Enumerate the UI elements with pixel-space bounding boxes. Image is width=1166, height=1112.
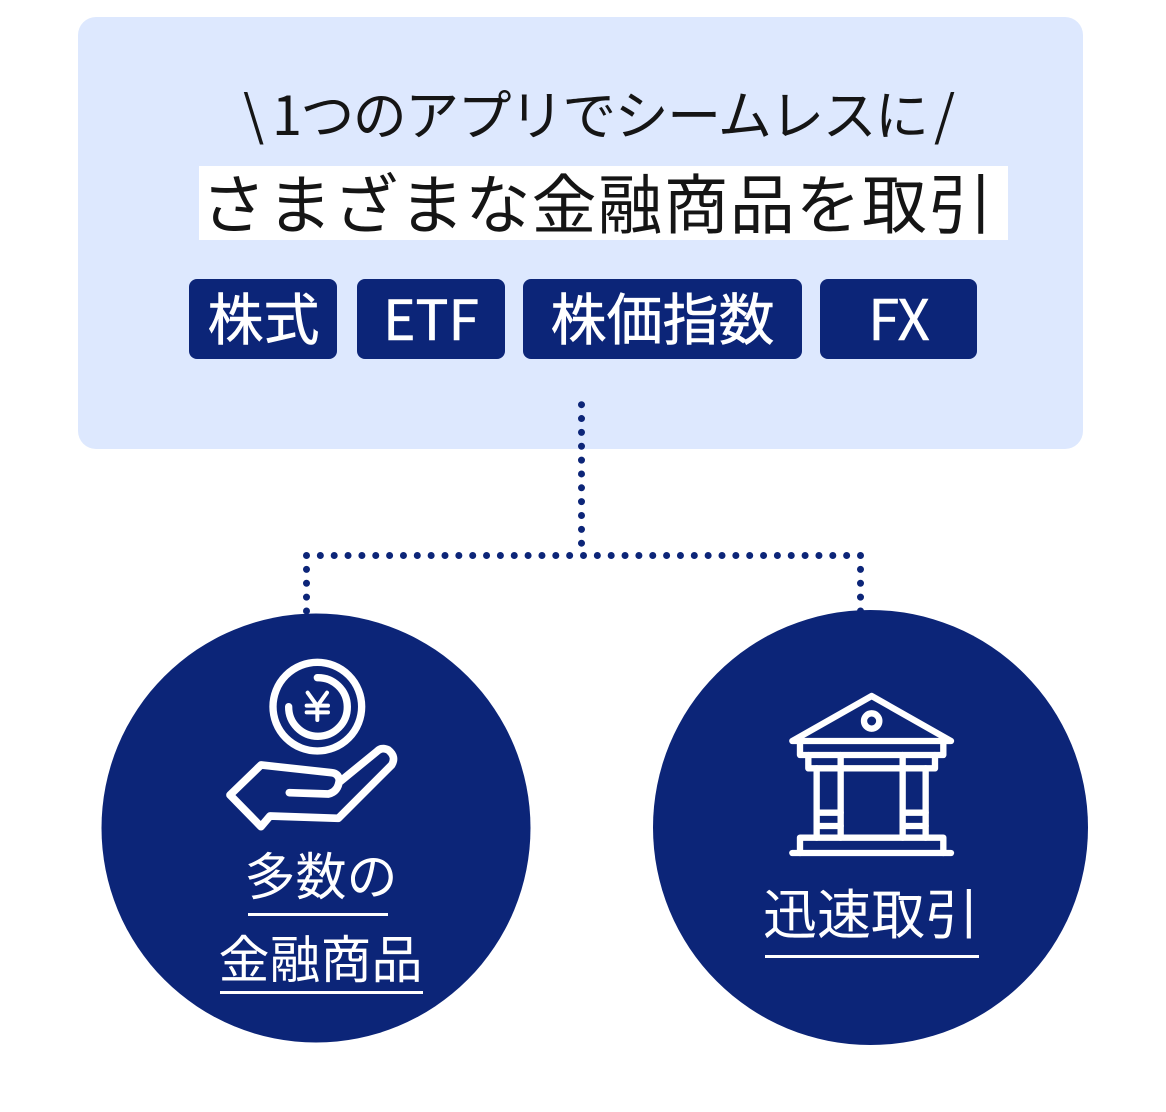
icon: yen coin over hand [230, 662, 394, 827]
circle: fast trading [653, 610, 1088, 1045]
tag: ETF [357, 276, 505, 359]
label: many: 多数の [244, 836, 398, 910]
icon: bank building [792, 696, 951, 853]
heading: highlighted title: さまざまな金融商品を取引 [201, 153, 993, 247]
connector: dotted lines [306, 405, 861, 612]
tag: stock index: 株価指数 [550, 276, 774, 357]
label: financial products: 金融商品 [218, 919, 423, 993]
heading: tagline: \ [243, 72, 264, 151]
tag: FX [820, 276, 977, 359]
circle: many financial products [102, 614, 530, 1042]
tag: stocks: 株式 [208, 276, 320, 357]
label: fast trading: 迅速取引 [763, 871, 979, 950]
tag: ETF: ETF [383, 276, 479, 356]
heading: tagline: / [934, 72, 955, 151]
panel: top summary [78, 17, 1083, 449]
heading: tagline: 1つのアプリでシームレスに [272, 72, 929, 151]
tag: FX: FX [868, 276, 930, 357]
